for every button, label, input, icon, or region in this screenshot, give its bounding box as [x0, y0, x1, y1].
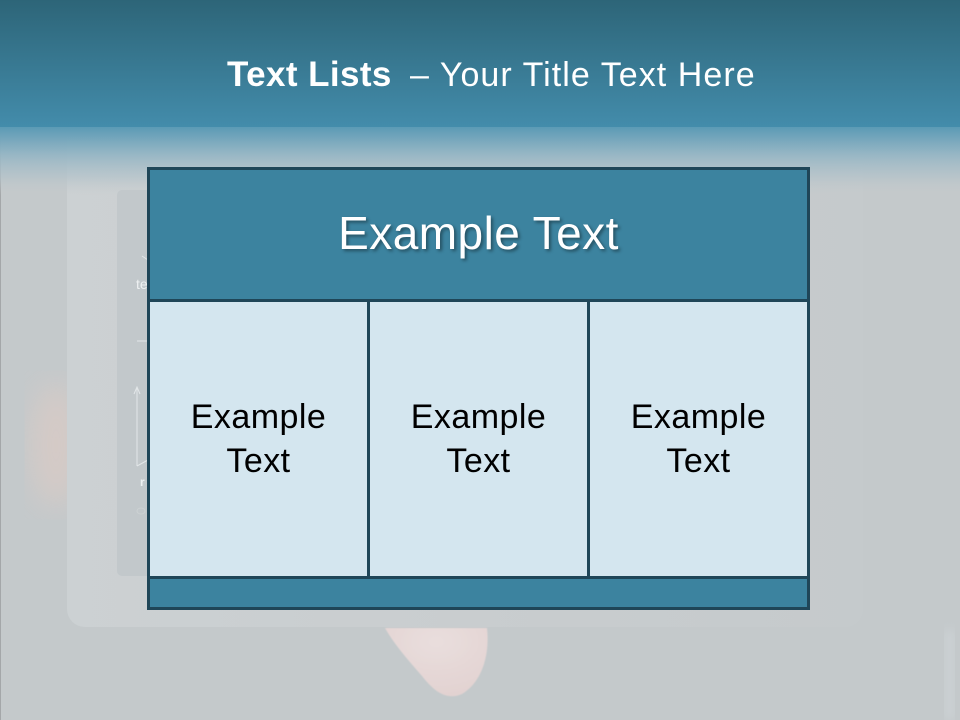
column 2 text — [411, 398, 546, 480]
finger — [385, 628, 488, 696]
column 2 — [370, 302, 587, 576]
column 3 — [590, 302, 807, 576]
tablet screen — [117, 190, 807, 576]
screen sketch marks — [134, 256, 148, 466]
column 3 text: Text — [666, 442, 731, 480]
lower right highlight — [945, 630, 954, 720]
thumb — [30, 383, 82, 507]
table header cell — [150, 170, 807, 299]
title — [227, 55, 756, 94]
column 1 text — [191, 398, 326, 480]
title bold part: Text Lists — [227, 55, 392, 94]
header band — [0, 0, 960, 127]
column 2 text: Example — [411, 398, 546, 436]
column 3 text — [631, 398, 766, 480]
table footer bar — [150, 579, 807, 607]
title regular part: – Your Title Text Here — [410, 56, 756, 94]
column 1 text: Example — [191, 398, 326, 436]
tablet body — [67, 110, 863, 627]
column 1 — [150, 302, 367, 576]
header text: Example Text — [338, 207, 619, 259]
fade below header — [0, 127, 960, 195]
column 1 text: Text — [226, 442, 291, 480]
background: blurred tablet photo: r — [140, 475, 145, 489]
column 3 text: Example — [631, 398, 766, 436]
panel: text table — [147, 167, 810, 610]
background: blurred tablet photo: te — [136, 276, 148, 292]
column 2 text: Text — [446, 442, 511, 480]
